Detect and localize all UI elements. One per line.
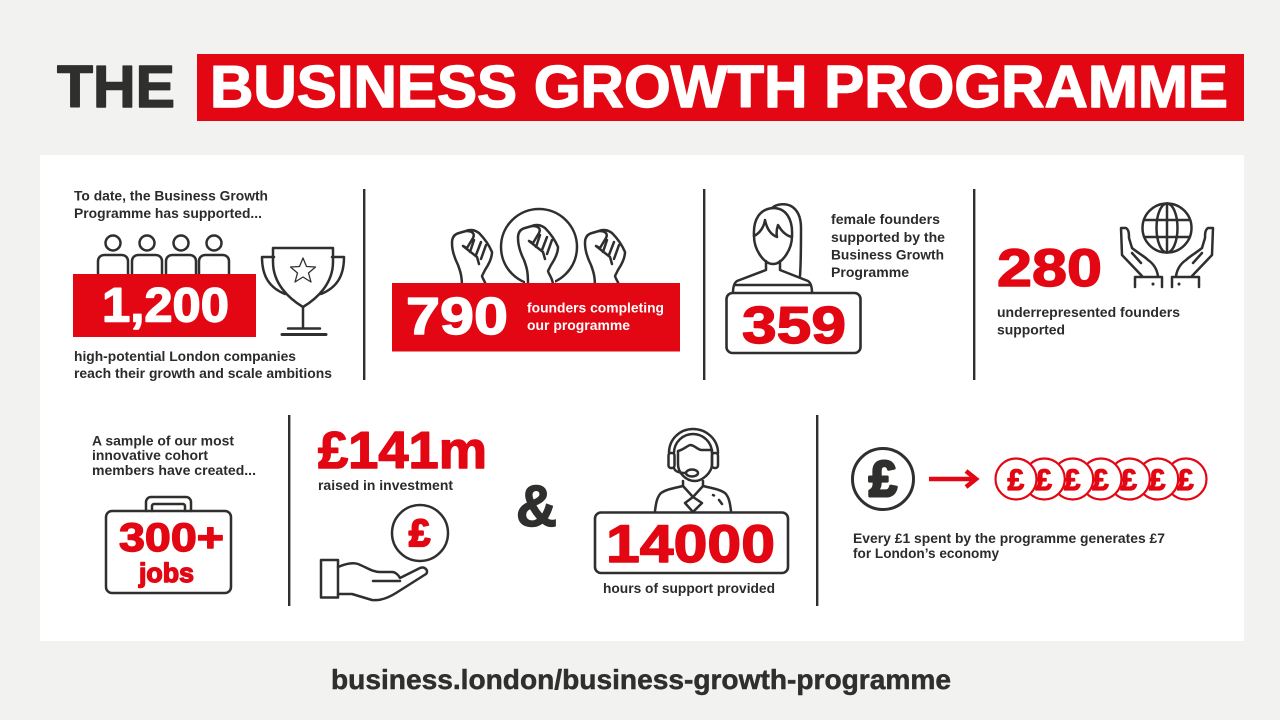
stat box: 790: 790 [406, 288, 508, 346]
icon: coin [392, 505, 448, 561]
icon: seven pound coins: £ [1064, 464, 1081, 497]
stat box: 1,200 [73, 274, 256, 337]
icon: raised fists [452, 209, 625, 289]
icon: hands holding globe [1121, 204, 1213, 287]
stat box: 359: 359 [742, 297, 846, 355]
icon: coin: £ [409, 513, 430, 555]
icon: pound coin [852, 448, 914, 510]
text: companies caption [74, 349, 332, 381]
stat: 300+ jobs [119, 516, 224, 588]
panel: 359 female founders [726, 204, 945, 355]
footer url: business.london/business-growth-programme [331, 664, 951, 695]
icon: seven pound coins: £ [1177, 464, 1194, 497]
text: intro: To date, the Business Growth [74, 188, 268, 204]
text: return caption [853, 531, 1165, 561]
icon: trophy [262, 248, 344, 334]
stat: 280: 280 [997, 239, 1102, 298]
text: underrepresented caption: underrepresented founders [997, 305, 1180, 320]
text: raised caption: raised in investment [318, 478, 454, 493]
panel: 790 founders [392, 209, 680, 352]
stat: 300+ jobs: 300+ [119, 516, 224, 560]
text: companies caption: reach their growth and scale ambitions [74, 366, 332, 381]
text: female founders caption: Business Growth [831, 248, 944, 262]
icon: pound coin: £ [869, 451, 897, 507]
text: sample intro: members have created... [92, 463, 256, 478]
stat box: 1,200: 1,200 [102, 280, 229, 332]
text: sample intro [92, 434, 256, 478]
stat box: 790: our programme [527, 318, 630, 333]
title: BUSINESS GROWTH PROGRAMME [210, 54, 1228, 120]
text: intro [74, 188, 268, 221]
text: underrepresented caption: supported [997, 322, 1065, 338]
text: intro: Programme has supported... [74, 206, 262, 221]
text: underrepresented caption [997, 305, 1180, 338]
stat box: 790: founders completing [527, 300, 664, 316]
icon: four people [98, 236, 229, 276]
title: THE [57, 54, 175, 120]
text: female founders caption [831, 212, 945, 280]
panel: white content card [40, 155, 1244, 641]
text: female founders caption: female founders [831, 212, 940, 227]
panel: £141m raised [318, 422, 487, 600]
panel: return on investment [852, 448, 1206, 561]
panel: 300+ jobs [92, 434, 256, 593]
icon: seven pound coins: £ [1149, 464, 1166, 497]
icon: seven pound coins [996, 458, 1206, 500]
stat: 300+ jobs: jobs [138, 558, 194, 588]
text: female founders caption: supported by the [831, 230, 945, 245]
icon: seven pound coins: £ [1008, 464, 1024, 497]
icon: seven pound coins: £ [1092, 464, 1109, 497]
text: return caption: Every £1 spent by the programme generates £7 [853, 531, 1165, 546]
ampersand: & [516, 474, 557, 539]
stat box: 790 [392, 283, 680, 352]
stat box: 359 [726, 293, 860, 355]
icon: seven pound coins: £ [1035, 464, 1052, 497]
text: hours caption: hours of support provided [603, 581, 775, 596]
icon: woman [733, 204, 812, 293]
text: companies caption: high-potential London companies [74, 349, 296, 364]
panel: 1,200 companies [73, 188, 344, 381]
icon: open hand [321, 560, 427, 600]
panel: 14000 hours [595, 429, 788, 596]
text: female founders caption: Programme [831, 265, 910, 280]
stat box: 14000: 14000 [606, 515, 775, 574]
icon: support agent [655, 429, 731, 512]
text: sample intro: innovative cohort [92, 448, 209, 463]
arrow [929, 471, 976, 487]
text: sample intro: A sample of our most [92, 434, 235, 448]
text: return caption: for London’s economy [853, 546, 999, 561]
stat: £141m: £141m [318, 422, 487, 480]
panel: 280 underrepresented founders [997, 204, 1213, 338]
icon: briefcase [106, 497, 231, 593]
icon: seven pound coins: £ [1120, 464, 1137, 497]
